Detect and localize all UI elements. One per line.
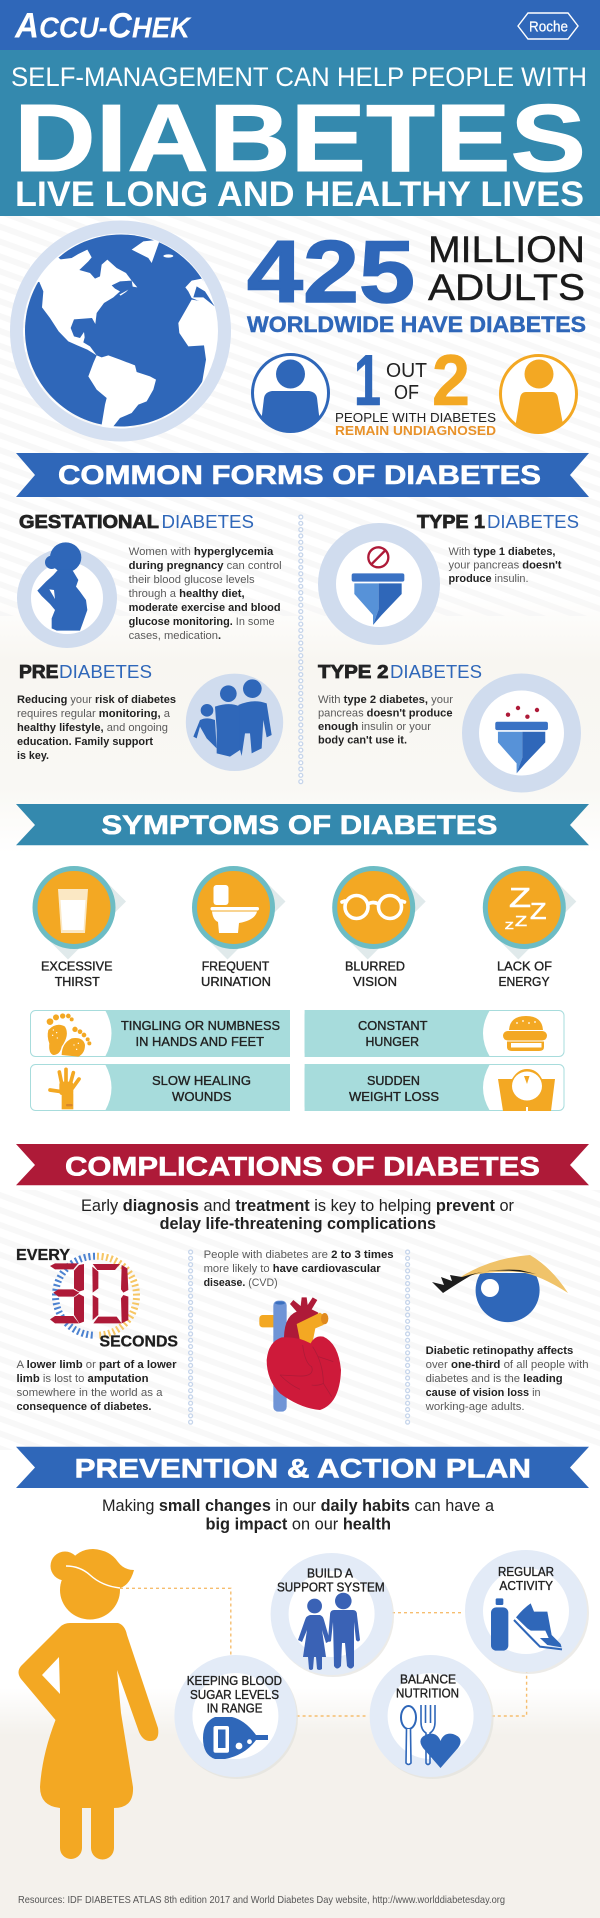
text: gestational description: during pregnancy can control	[129, 560, 282, 572]
text: type 2 description: pancreas doesn't produce	[318, 708, 453, 720]
icon: bathroom scale	[498, 1069, 555, 1111]
ribbon: common forms	[16, 453, 589, 497]
text: type 1 description: your pancreas doesn't	[448, 560, 562, 572]
card: constant hunger	[305, 1010, 564, 1057]
logo: Roche	[518, 13, 578, 39]
icon: sleeping Z letters: Z	[509, 882, 531, 913]
card: sudden weight loss: SUDDEN	[367, 1074, 420, 1088]
text: gestational description	[129, 546, 282, 642]
title band: LIVE LONG AND HEALTHY LIVES	[15, 175, 584, 214]
text: complications intro: delay life-threatening complications	[160, 1215, 436, 1233]
icon: blocked funnel	[327, 532, 431, 636]
statistic: 425 million adults: MILLION	[428, 229, 585, 270]
card: sudden weight loss: WEIGHT LOSS	[349, 1090, 439, 1104]
statistic: 1 out of 2: 2	[432, 341, 470, 421]
icon: family	[186, 674, 283, 771]
statistic: 425 million adults	[247, 222, 586, 337]
icon: sleeping Z letters: Z	[515, 913, 527, 930]
ribbon: prevention	[16, 1447, 589, 1488]
panel: prediabetes	[17, 661, 283, 771]
text: prediabetes description: education. Family support	[17, 736, 153, 748]
symptom: excessive thirst	[35, 868, 126, 989]
icon: funnel with insulin drops	[470, 682, 572, 784]
figure: woman	[18, 1549, 158, 1860]
text: type 1 description: With type 1 diabetes,	[448, 546, 556, 558]
text: complications intro	[81, 1197, 514, 1233]
icon: pregnant woman	[24, 542, 110, 641]
title band: SELF-MANAGEMENT CAN HELP PEOPLE WITH	[11, 62, 587, 92]
heading: type 1	[417, 511, 579, 532]
text: retinopathy	[425, 1345, 589, 1413]
text: retinopathy: diabetes and is the leading	[426, 1373, 563, 1385]
graphic: every 30 seconds timer: SECONDS	[100, 1334, 178, 1351]
circle: keeping blood sugar in range: SUGAR LEVELS	[190, 1688, 279, 1702]
symptom: excessive thirst: THIRST	[55, 975, 100, 989]
text: retinopathy: cause of vision loss in	[426, 1387, 541, 1399]
statistic: 1 out of 2: PEOPLE WITH DIABETES	[335, 411, 496, 425]
panel: gestational diabetes	[19, 511, 282, 642]
text: retinopathy: Diabetic retinopathy affects	[426, 1345, 573, 1357]
icon: eye	[432, 1255, 568, 1322]
text: amputation	[16, 1359, 177, 1413]
card: tingling or numbness	[30, 1010, 290, 1057]
card: constant hunger: HUNGER	[366, 1035, 419, 1049]
symptom: lack of energy: ENERGY	[498, 975, 550, 989]
panel: type 2 diabetes	[318, 661, 572, 784]
text: type 2 description: With type 2 diabetes, your	[318, 694, 453, 706]
icon: glasses	[342, 896, 404, 918]
circle: regular activity	[467, 1552, 589, 1674]
text: type 1 description: produce insulin.	[448, 573, 528, 585]
symptom: excessive thirst: EXCESSIVE	[41, 960, 112, 974]
ribbon: prevention: PREVENTION & ACTION PLAN	[75, 1453, 531, 1483]
icon: hand	[50, 1069, 79, 1109]
symptom: blurred vision	[335, 868, 426, 989]
heading: prediabetes	[19, 661, 152, 682]
circle: keeping blood sugar in range: IN RANGE	[207, 1702, 262, 1716]
statistic: 1 out of 2: OF	[394, 382, 419, 404]
icon: orange person in circle	[500, 356, 576, 440]
text: gestational description: moderate exercise and blood	[129, 602, 281, 614]
icon: glass of water	[58, 889, 88, 933]
icon: sleeping Z letters: Z	[505, 921, 514, 932]
text: resources footer: Resources: IDF DIABETES ATLAS 8th edition 2017 and World Diabetes Day website, http://www.worlddiabetesday.org	[18, 1894, 505, 1906]
graphic: every 30 seconds timer	[16, 1247, 178, 1351]
symptom: blurred vision: BLURRED	[345, 960, 405, 974]
ribbon: complications	[16, 1144, 589, 1185]
header bar with logos	[0, 0, 600, 50]
text: cardiovascular: disease. (CVD)	[204, 1277, 278, 1289]
symptom: blurred vision: VISION	[353, 975, 397, 989]
circle: balance nutrition: BALANCE	[400, 1672, 456, 1686]
icon: couple	[298, 1593, 360, 1670]
card: slow healing wounds	[30, 1064, 290, 1111]
text: type 1 description	[448, 546, 562, 585]
text: prediabetes description: is key.	[17, 750, 49, 762]
statistic: 1 out of 2: REMAIN UNDIAGNOSED	[335, 424, 496, 438]
card: slow healing wounds: SLOW HEALING	[152, 1074, 251, 1088]
statistic: 1 out of 2: 1	[354, 341, 381, 421]
text: amputation: somewhere in the world as a	[16, 1387, 163, 1399]
card: slow healing wounds: WOUNDS	[172, 1090, 232, 1104]
text: complications intro: Early diagnosis and treatment is key to helping prevent or	[81, 1197, 514, 1215]
heading: prediabetes: DIABETES	[59, 661, 152, 682]
ribbon: common forms: COMMON FORMS OF DIABETES	[58, 460, 541, 490]
statistic: 1 out of 2: OUT	[386, 360, 427, 382]
text: prevention intro: Making small changes in our daily habits can have a	[102, 1497, 495, 1515]
text: prevention intro: big impact on our health	[206, 1515, 391, 1533]
icon: glucose meter	[203, 1717, 268, 1759]
symptom: frequent urination: FREQUENT	[202, 960, 270, 974]
graphic: every 30 seconds timer: EVERY	[16, 1247, 70, 1264]
icon: toilet	[210, 885, 259, 933]
card: sudden weight loss	[305, 1064, 564, 1111]
circle: balance nutrition: NUTRITION	[396, 1686, 459, 1700]
text: type 2 description: body can't use it.	[318, 734, 407, 746]
logo: Accu-Chek: ACCU-CHEK	[14, 6, 192, 46]
text: gestational description: cases, medication.	[129, 630, 221, 642]
circle: build a support system: SUPPORT SYSTEM	[277, 1581, 385, 1595]
symptom: frequent urination	[194, 868, 286, 989]
heading: gestational: GESTATIONAL	[19, 511, 159, 532]
dashed connectors	[120, 1588, 527, 1716]
text: amputation: A lower limb or part of a lower	[16, 1359, 177, 1371]
circle: build a support system: BUILD A	[307, 1567, 354, 1581]
text: amputation: limb is lost to amputation	[16, 1373, 149, 1385]
panel: cardiovascular disease	[204, 1249, 394, 1412]
text: gestational description: through a healthy diet,	[129, 588, 245, 600]
heading: type 2: DIABETES	[390, 661, 482, 682]
title band: DIABETES	[14, 85, 586, 192]
icon: sleeping Z letters: Z	[530, 898, 546, 924]
text: prediabetes description: requires regular monitoring, a	[17, 708, 171, 720]
panel: amputation statistic	[16, 1247, 178, 1413]
text: retinopathy: over one-third of all people with	[426, 1359, 589, 1371]
text: gestational description: Women with hyperglycemia	[129, 546, 274, 558]
heading: gestational	[19, 511, 254, 532]
card: tingling or numbness: IN HANDS AND FEET	[136, 1035, 264, 1049]
text: type 2 description	[318, 694, 453, 746]
icon: sleeping Z letters	[505, 882, 546, 932]
text: prevention intro	[102, 1497, 495, 1533]
icon: spoon, fork and heart	[401, 1705, 461, 1768]
text: gestational description: their blood glucose levels	[129, 574, 255, 586]
text: cardiovascular: more likely to have cardiovascular	[204, 1263, 381, 1275]
heading: type 1: DIABETES	[487, 511, 579, 532]
text: gestational description: glucose monitoring. In some	[129, 616, 275, 628]
panel: diabetic retinopathy	[425, 1255, 589, 1413]
statistic: 425 million adults: ADULTS	[428, 267, 585, 308]
circle: build a support system	[272, 1555, 394, 1677]
panel: type 1 diabetes	[327, 511, 579, 636]
title band	[0, 50, 600, 216]
circle: keeping blood sugar in range	[176, 1657, 298, 1779]
statistic: 425 million adults: WORLDWIDE HAVE DIABETES	[247, 312, 586, 337]
heading: gestational: DIABETES	[162, 511, 254, 532]
text: retinopathy: working-age adults.	[425, 1401, 525, 1413]
logo: Roche: Roche	[529, 18, 568, 36]
text: cardiovascular	[204, 1249, 394, 1289]
heading: prediabetes: PRE	[19, 661, 58, 682]
text: prediabetes description: healthy lifestyle, and ongoing	[17, 722, 168, 734]
statistic: 425 million adults: 425	[247, 222, 415, 321]
ribbon: symptoms: SYMPTOMS OF DIABETES	[101, 810, 497, 840]
card: tingling or numbness: TINGLING OR NUMBNESS	[121, 1019, 280, 1033]
text: prediabetes description: Reducing your risk of diabetes	[17, 694, 176, 706]
heading: type 2: TYPE 2	[318, 661, 388, 682]
icon: bottle and shoe	[491, 1598, 562, 1651]
circle: regular activity: ACTIVITY	[499, 1579, 554, 1593]
card: constant hunger: CONSTANT	[358, 1019, 428, 1033]
symptom: lack of energy: LACK OF	[497, 960, 552, 974]
icon: feet	[47, 1013, 91, 1057]
text: amputation: consequence of diabetes.	[16, 1401, 152, 1413]
icon: blue person in circle	[252, 354, 328, 440]
text: cardiovascular: People with diabetes are 2 to 3 times	[204, 1249, 394, 1261]
icon: globe	[16, 227, 230, 435]
statistic: 1 out of 2	[335, 341, 496, 438]
icon: heart	[259, 1297, 341, 1412]
heading: type 1: TYPE 1	[417, 511, 485, 532]
ribbon: complications: COMPLICATIONS OF DIABETES	[65, 1151, 540, 1181]
icon: burger	[503, 1016, 547, 1051]
symptom: lack of energy	[485, 868, 576, 989]
circle: keeping blood sugar in range: KEEPING BLOOD	[187, 1674, 282, 1688]
text: prediabetes description	[17, 694, 176, 762]
ribbon: symptoms	[16, 804, 589, 845]
symptom: frequent urination: URINATION	[201, 975, 271, 989]
circle: regular activity: REGULAR	[498, 1565, 554, 1579]
text: type 2 description: enough insulin or your	[318, 721, 431, 733]
heading: type 2	[318, 661, 482, 682]
circle: balance nutrition	[372, 1657, 494, 1779]
